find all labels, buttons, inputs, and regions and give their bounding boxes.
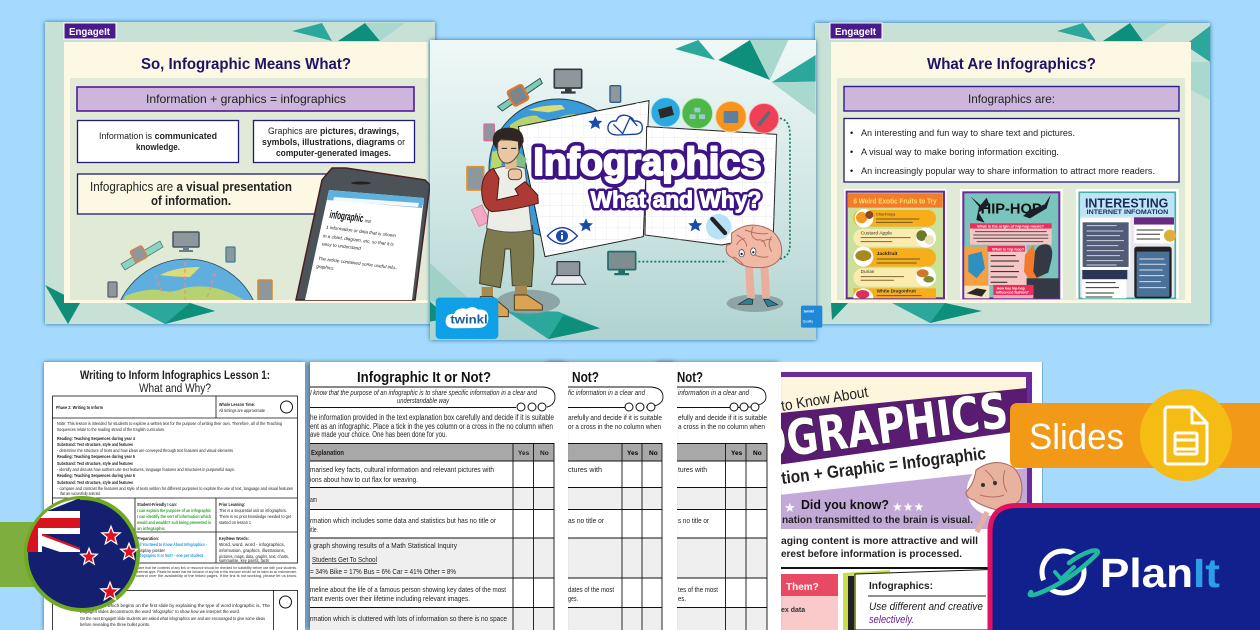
lesson table: display poster [137,548,166,553]
lesson table: Reading: Teaching Sequences during year 6 [57,473,136,478]
lesson table: that are successfully selected [60,491,100,496]
dictionary definition: 1 information or data that is shown [326,225,397,238]
table: No [649,450,658,457]
poster body text [781,536,978,559]
thumbnail: interesting internet information infographic [1076,189,1179,298]
second lesson table: before revealing the three bullet points. [80,622,150,627]
badge: approval mark [801,306,822,328]
worksheet fragments text: or a cross in the no column when [568,422,661,431]
table: marised key facts, cultural information and relevant pictures with [310,465,494,474]
lesson table: Phase 2: Writing to Inform [56,405,103,410]
lesson title: Writing to Inform Infographics Lesson 1: [80,370,270,382]
poster: notebook panel: Use different and creative [869,601,983,613]
small print [60,566,297,578]
device icons [467,69,636,284]
icon: orbit logo [1030,550,1098,595]
title text [533,141,762,213]
box: graphics definition: Graphics are pictures, drawings, [268,126,399,137]
worksheet fragments text: as no title or [568,516,604,525]
lesson table: There is no prior knowledge needed to get [219,514,292,519]
lesson table: pictures, maps, data, graphs, text, charts, [219,554,289,559]
lesson table: Word, word, word - infographics, [219,542,285,547]
lesson table [52,396,298,563]
lesson table: Sequences relate to the reading strand of the English curriculum. [57,427,165,432]
character: boy thinking [480,128,560,317]
box: infographics statement: Infographics are a visual presentation [90,180,292,194]
lesson table: - compare and contrast the features and style of texts written for different purposes to explore the use of text, language and visual features [57,486,293,491]
box: graphics definition: computer-generated images. [276,148,391,159]
title text: Infographics [533,141,762,184]
table [310,443,554,630]
illustration: phone dictionary [296,168,430,300]
badge: Slides: Slides [1029,416,1124,457]
worksheet fragments text [568,369,662,623]
worksheet fragments text: s no title or [678,516,709,525]
table: Explanation [311,448,344,457]
poster body text: aging content is more attractive and will [781,535,978,547]
purple bar [844,86,1179,111]
bullet list: • [850,147,853,157]
table: rmation which includes some data and statistics but has no title or [310,516,496,525]
worksheet fragments text: a cross in the no column when [678,422,765,431]
table: = 34% Bike = 17% Bus = 6% Car = 41% Other = 8% [310,567,456,576]
lesson table: Student-Friendly I can: [137,502,177,507]
lesson table: Preparation: [137,536,159,541]
dotted connector [638,118,790,262]
character: brain [726,225,783,312]
second lesson table: Presentation which begins on the first slide by explaining the type of word infographic is. The [80,603,271,608]
did you know: ★★★ [892,500,924,514]
decorative triangles [430,40,816,339]
table [568,443,662,630]
table: rtant events over their lifetime including relevant images. [310,594,470,603]
poster equation: tion + Graphic = Infographic [780,443,987,488]
lesson table: Whole Lesson Time: [219,402,255,407]
slide: title cover [430,40,822,340]
table: No [540,450,549,457]
bullet list: • [850,166,853,176]
learning objective: understandable way [397,396,450,405]
lesson table: Note: This lesson is intended for students to explore a written text for the purpose of writing their own. Therefore, all of the Teaching [57,421,283,426]
lesson table: I can explain the purpose of an infographic [137,508,212,513]
table [677,443,767,630]
poster subtitle: to Know About [780,384,870,415]
flag badge: New Zealand [0,490,138,610]
worksheet fragments text: tures with [678,465,707,474]
purple equation bar [77,87,414,111]
learning objective [310,387,555,411]
worksheet fragments text: arefully and decide if it is suitable [568,413,662,422]
lesson table: Substrand: Text structure, style and features [57,480,134,485]
instructions: he information provided in the text explanation box carefully and decide if it is suitable [310,413,554,422]
worksheet fragments text: information in a clear and [678,388,750,397]
box: graphics definition: symbols, illustrations, diagrams or [262,137,405,148]
union jack [27,499,80,552]
title text: What and Why? [591,187,761,213]
instructions: ent as an infographic. Place a tick in the yes column or a cross in the no column when [310,422,553,431]
box: information definition [78,120,238,162]
lesson table: summarise, key points, facts [219,558,269,563]
second lesson table: On the next EngageIt slide students are asked what infographics are and are encouraged to give some ideas [80,616,266,621]
worksheet fragments text: ctures with [568,465,602,474]
lesson table: Reading: Teaching Sequences during year 5 [57,454,136,459]
illustration: globe and devices [107,231,273,300]
paper spread [518,101,777,257]
box: graphics definition [254,120,414,162]
lesson table: This is a sequential unit on infographics. [219,508,287,513]
worksheet fragments text: efully and decide if it is suitable [678,413,767,422]
table: rmation which is cluttered with lots of information so there is no space [310,614,507,623]
second lesson table [52,590,298,630]
table: Students Get To School [312,555,377,564]
table: meline about the life of a famous person showing key dates of the most [310,585,507,594]
slide: So, Infographic Means What? [42,19,438,327]
dictionary headword: infographic noun [329,209,372,226]
slide: What Are Infographics? [815,23,1210,324]
lesson table: Prior Learning: [219,502,245,507]
thumbnail: exotic fruits infographic: Jackfruit [877,251,898,257]
badge: PlanIt: PlanIt [1100,550,1220,596]
worksheet title: Infographic It or Not? [357,369,491,386]
bullet list: An interesting and fun way to share text and pictures. [861,128,1075,139]
worksheet fragments text: Not? [572,369,599,386]
thumbnail: interesting internet information infographic: INTERNET INFOMATION [1087,209,1169,216]
tab: EngageIt [64,23,116,39]
lesson title: What and Why? [139,383,211,395]
tab: EngageIt: EngageIt [69,27,111,38]
tab: EngageIt: EngageIt [835,27,877,38]
thumbnail: exotic fruits infographic [844,189,947,299]
thumbnail: hip-hop infographic: How has hip-hop [997,287,1025,291]
box: infographics statement: of information. [151,194,231,208]
lesson table: I can identify the sort of information which [137,514,211,519]
lesson table: Substrand: Text structure, style and features [57,461,134,466]
did you know: nation transmitted to the brain is visual. [782,514,973,526]
lesson table: Key/New Words: [219,536,249,541]
worksheet fragments text: there is no space [569,614,615,623]
worksheet page: third copy [550,362,677,630]
instructions: ave made your choice. One has been done for you. [310,430,447,439]
illustration: phone dictionary: in a chart, diagram, etc. so that it is [323,233,395,247]
thumbnail: exotic fruits infographic: Custard Apple [861,230,892,236]
stars [82,528,136,598]
box: information definition: knowledge. [136,142,180,153]
bullet list: • [850,128,853,138]
heading: So, Infographic Means What? [141,56,351,73]
table: No [753,450,762,457]
title text: What and Why? [591,187,761,213]
did you know: Did you know? [801,497,889,512]
lesson table: All timings are approximate [219,408,266,413]
second lesson table: EngageIt slides deconstructs the word 'infographic' to show how we interpret the word. [80,609,240,614]
poster brain [966,462,1022,535]
paper icons [547,115,731,244]
thumbnail: interesting internet information infographic: INTERESTING [1085,197,1168,211]
box: information definition: Information is communicated [99,131,217,142]
purple bar: Infographics are: [968,92,1055,106]
thumbnail: exotic fruits infographic: Cherimoya [876,212,896,217]
thumbnail: hip-hop infographic: HIP-HOP [981,201,1042,217]
thumbnail: hip-hop infographic: influenced fashion? [996,291,1029,295]
thumbnail: hip-hop infographic: What is the origin of hip-hop music? [977,224,1045,228]
thumbnail: hip-hop infographic [960,189,1063,298]
poster body text: erest before information is processed. [781,548,962,560]
poster: why use them panel: Them? [786,582,819,593]
did you know: ★ [784,500,796,515]
worksheet fragments text [677,369,767,623]
lesson title [80,370,270,395]
bullet list: An increasingly popular way to share information to attract more readers. [861,166,1155,177]
lesson table: started on lesson 1 [219,520,252,525]
poster: notebook panel: Infographics: [869,580,933,592]
badge: Slides [1010,389,1260,481]
title text: Infographics [533,141,762,184]
box: infographics statement [78,174,378,214]
thumbnail: hip-hop infographic: What is hip-hop? [992,246,1025,251]
worksheet fragments text: ges. [568,594,578,603]
worksheet page: Infographic It or Not? [310,362,568,630]
lesson table: All You Need to Know About Infographics - [137,542,207,547]
table: i graph showing results of a Math Statistical Inquiry [310,541,457,550]
did you know [782,500,972,523]
logo: twinkl [436,298,498,339]
heading: What Are Infographics? [927,56,1096,73]
badge: approval mark: twinkl [804,309,814,313]
poster title: IOGRAPHICS [736,382,1011,474]
banner [770,388,1027,466]
worksheet fragments text: es. [678,594,686,603]
poster: why use them panel [781,574,838,630]
worksheet fragments text: here is no space [678,614,720,623]
thumbnail: exotic fruits infographic: White Dragonfruit [877,288,916,293]
poster: notebook panel: selectively. [869,614,914,626]
lesson table: an infographic [137,526,166,531]
poster: notebook panel [843,569,988,630]
poster: why use them panel: ex data [781,607,805,614]
lesson table: Infographic It or Not? - one per student [137,553,204,558]
purple equation bar: Information + graphics = infographics [146,92,346,106]
thumbnail: exotic fruits infographic: 6 Weird Exotic Fruits to Try [853,198,937,205]
lesson table: information, graphics, illustrations, [219,548,285,553]
small print: This resource contains links to external websites and/or external apps. Please be aware that the inclusion of any link in this resource should not be taken as an endorsement. [60,570,297,574]
table: am [310,495,317,504]
bullet list [844,118,1179,182]
worksheet page: fourth copy [660,362,781,630]
table: Yes [627,450,639,457]
table: itle. [310,525,318,534]
table: Yes [731,450,743,457]
lesson table: Substrand: Text structure, style and features [57,442,134,447]
lesson table: would and wouldn't suit being presented in [136,520,211,525]
tab: EngageIt [830,23,882,39]
small print: You should also be aware that we have no control over the availability of the linked pages. If the link is not working, please let us know. [60,574,297,578]
lesson table: - identify and discuss how authors use text features, language features and structures in purposeful ways. [57,467,235,472]
badge: approval mark: Quality [803,319,813,323]
badges [651,98,779,133]
illustration: phone dictionary: graphics. [316,264,335,271]
table: Yes [518,450,530,457]
learning objective: I know that the purpose of an infographic is to share specific information in a clear and [310,388,538,397]
globe [489,99,628,238]
illustration: phone dictionary: easy to understand [322,241,362,251]
lesson table: Reading: Teaching Sequences during year 4 [57,436,136,441]
lesson plan page [44,362,305,630]
small print: These are only suggested lesson plans. Please be aware that the contents of any link or resource should be checked for suitability before use with your students. [60,566,297,570]
worksheet fragments text: tes of the most [678,585,719,594]
worksheet fragments text: Not? [677,369,703,386]
thumbnail: exotic fruits infographic: Durian [861,269,875,274]
lesson table: - determine the structure of texts and how ideas are conveyed through text features and visual elements [57,448,233,453]
worksheet fragments text: fic information in a clear and [568,388,646,397]
icon: document [1165,407,1207,464]
table: ions about how to cut flax for weaving. [310,475,418,484]
badge: PlanIt [990,506,1260,630]
bullet list: A visual way to make boring information exciting. [861,147,1059,158]
worksheet fragments text: dates of the most [568,585,615,594]
illustration: phone dictionary: The article contained some useful info- [318,256,397,271]
instructions [310,413,554,439]
worksheet page: know about infographics poster [781,362,1043,630]
logo: twinkl: twinkl [450,314,488,327]
